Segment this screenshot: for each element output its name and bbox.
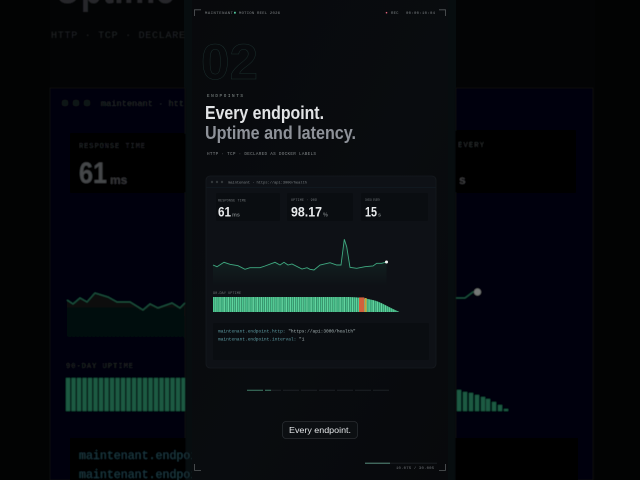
dashboard card [206,176,436,368]
right backdrop uptime bars [457,390,508,411]
backdrop code line 1: maintenant.endpoi [79,450,197,463]
right backdrop code box [456,438,578,480]
caption pill [282,422,358,438]
header status dot [234,12,236,14]
right backdrop window frame [456,88,593,480]
backdrop window address: maintenant · htt [101,99,184,109]
stat: uptime: UPTIME · 90D [291,199,317,203]
right backdrop stat label: EVERY [458,142,485,150]
stat: check every: CHECK EVERY [365,199,380,203]
stat: check every: 15 [365,204,377,220]
right backdrop chart marker [474,288,481,296]
headline: Every endpoint. [205,102,324,123]
window title bar: maintenant · https://api:3000/health [228,180,307,185]
chapter progress segments [247,389,389,391]
backdrop uptime label: 90-DAY UPTIME [66,363,133,371]
blurred backdrop: right side [456,88,593,480]
headline [205,102,356,143]
right backdrop chart stroke [456,292,477,298]
right backdrop stat unit: s [459,173,466,187]
stat: uptime: % [323,212,328,218]
backdrop subtitle: HTTP · TCP · DECLARE [51,31,185,42]
backdrop window dots [62,100,90,106]
labels code block: maintenant.endpoint.interval: "1 [218,336,305,342]
header right: recording timecode: REC [391,12,399,16]
stat: response time: ms [232,212,240,218]
backdrop code box [70,438,185,480]
backdrop stat label: RESPONSE TIME [79,143,145,151]
backdrop stat value: 61 [79,157,107,190]
header left: MAINTENANT [205,12,234,16]
right backdrop stat box [456,130,576,193]
window title bar [206,180,436,188]
centre phone panel [192,0,448,480]
stat: check every: s [378,212,381,218]
latency line chart [213,239,388,286]
corner brackets [194,10,446,470]
stat: response time [216,193,280,221]
backdrop chart area [67,293,185,340]
backdrop window frame [50,88,185,480]
labels code block [213,323,429,360]
stat: uptime: 98.17 [291,204,322,220]
uptime label: 90-DAY UPTIME [213,292,241,296]
section eyebrow: ENDPOINTS [207,94,243,99]
header left: MOTION REEL 2026 [239,12,281,16]
uptime bar chart [213,297,400,312]
labels code block: maintenant.endpoint.http: "https://api:3000/health" [218,328,356,334]
stat: check every [361,193,428,221]
backdrop uptime bars [66,378,185,411]
header left [205,12,281,16]
timeline progress bar [365,462,437,464]
stat: response time: RESPONSE TIME [218,200,246,204]
header right: recording timecode: 00:00:10:04 [406,12,436,16]
backdrop stat box [70,133,185,193]
stat: response time: 61 [218,204,231,220]
header right: recording timecode [386,12,436,16]
headline: Uptime and latency. [205,122,356,143]
blurred backdrop: left side [50,0,197,480]
subheading: HTTP · TCP · DECLARED AS DOCKER LABELS [207,152,316,157]
backdrop chart stroke [67,293,185,310]
caption pill: Every endpoint. [289,425,351,435]
timecode readout: 10.07S / 30.00S [396,466,435,471]
chapter number outlined: 02 [201,34,258,90]
stat: uptime [287,193,353,221]
backdrop stat unit: ms [110,173,128,187]
